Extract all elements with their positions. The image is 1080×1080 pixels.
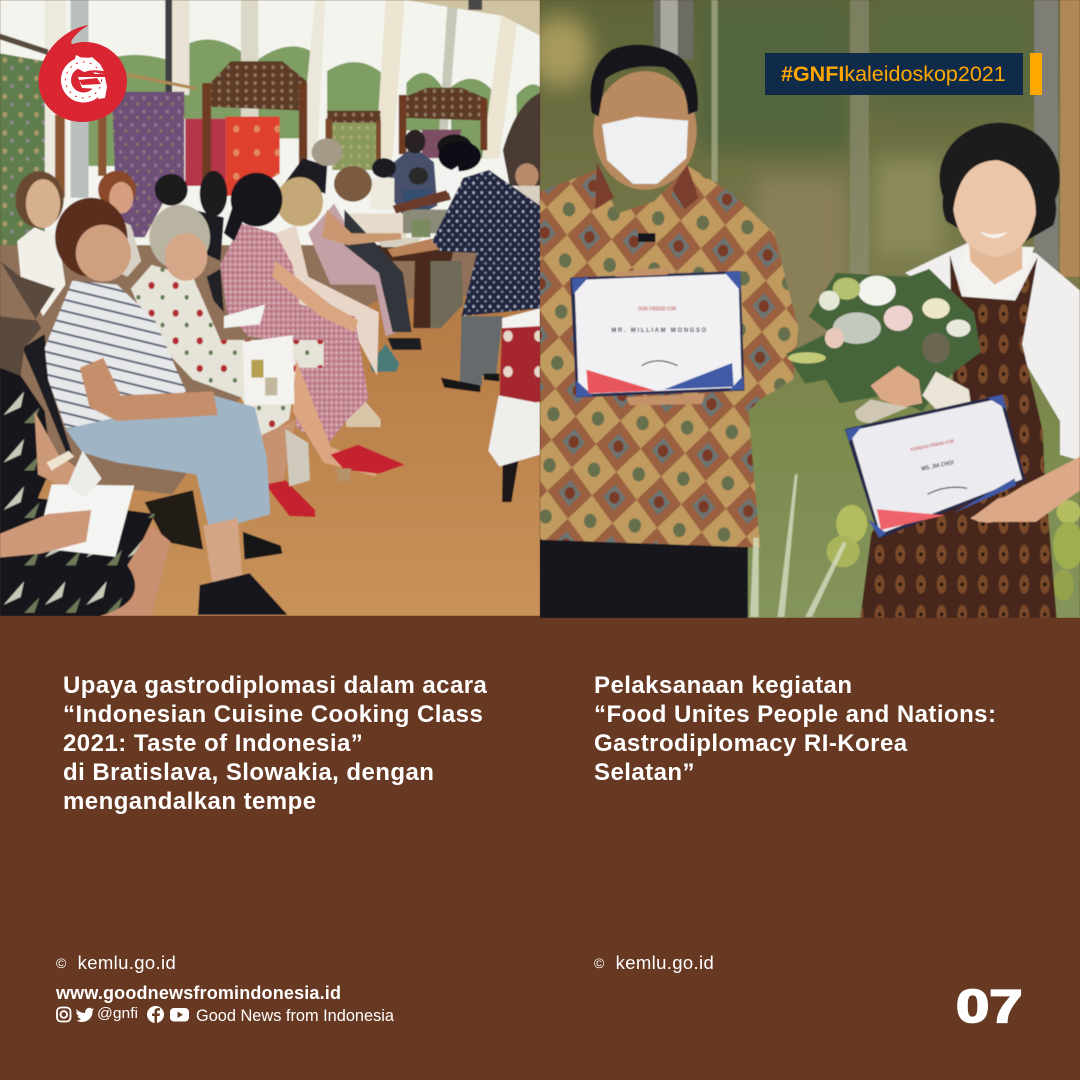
bouquet — [786, 269, 981, 411]
caption: right photo: Pelaksanaan kegiatan — [594, 672, 852, 699]
accent bar — [1030, 53, 1042, 95]
source credit: left: © kemlu.go.id — [56, 952, 176, 973]
website url: www.goodnewsfromindonesia.id — [56, 983, 341, 1003]
G emblem — [66, 55, 112, 99]
logo: GNFI red badge — [38, 25, 127, 122]
plants — [750, 474, 1080, 617]
caption: left photo: Upaya gastrodiplomasi dalam acara — [63, 672, 487, 699]
icon: facebook — [147, 1006, 164, 1023]
seated women row — [15, 166, 422, 427]
caption: right photo: Selatan” — [594, 759, 695, 786]
caption: left photo: mengandalkan tempe — [63, 788, 317, 815]
source credit: right: © kemlu.go.id — [594, 952, 714, 973]
certificate: Jia Choi — [845, 395, 1026, 539]
blurred garden background — [530, 0, 1080, 618]
social icons and handles — [56, 1005, 395, 1025]
icon: instagram — [57, 1008, 70, 1022]
page number: 07 — [956, 980, 1023, 1032]
red table with white cloth — [488, 308, 540, 502]
photo: William Wongso and Jia Choi holding certificates — [540, 0, 1080, 618]
caption: left photo — [63, 672, 487, 815]
certificate: Jia Choi: MS. JIA CHOI — [921, 460, 955, 473]
front left woman with booklet — [0, 261, 170, 616]
woman serving food — [387, 141, 540, 392]
woman in striped shirt — [45, 198, 288, 615]
carved wood frames — [202, 61, 540, 194]
woman in floral dress — [131, 205, 405, 517]
certificate: Jia Choi: KOREAN FRIEND FOR — [910, 438, 955, 452]
man in batik shirt — [540, 45, 798, 618]
small serving table — [372, 219, 463, 328]
certificate: William Wongso — [570, 271, 745, 397]
caption: right photo: “Food Unites People and Nations: — [594, 701, 996, 728]
hashtag label: #GNFIkaleidoskop2021 — [781, 62, 1006, 86]
caption: left photo: 2021: Taste of Indonesia” — [63, 730, 363, 757]
icon: twitter — [76, 1008, 94, 1022]
hashtag label — [765, 53, 1023, 95]
caption: left photo: di Bratislava, Slowakia, dengan — [63, 759, 434, 786]
windows and sky — [0, 0, 540, 616]
caption: right photo: Gastrodiplomacy RI-Korea — [594, 730, 908, 757]
caption: right photo — [594, 672, 996, 786]
batik panels — [0, 34, 461, 253]
caption: left photo: “Indonesian Cuisine Cooking Class — [63, 701, 483, 728]
back row people — [282, 130, 540, 241]
wood floor — [0, 245, 540, 616]
certificate: William Wongso: MR. WILLIAM WONGSO — [611, 327, 706, 334]
icon: youtube — [170, 1008, 189, 1022]
page name: Good News from Indonesia — [196, 1006, 395, 1025]
handle: @gnfi — [97, 1005, 138, 1022]
photo: cooking class audience in Bratislava — [0, 0, 540, 616]
woman in pink dress — [220, 173, 368, 447]
woman with bouquet — [786, 123, 1080, 618]
certificate: William Wongso: OUR FRIEND FOR — [638, 306, 677, 313]
chair and bag — [22, 269, 224, 550]
